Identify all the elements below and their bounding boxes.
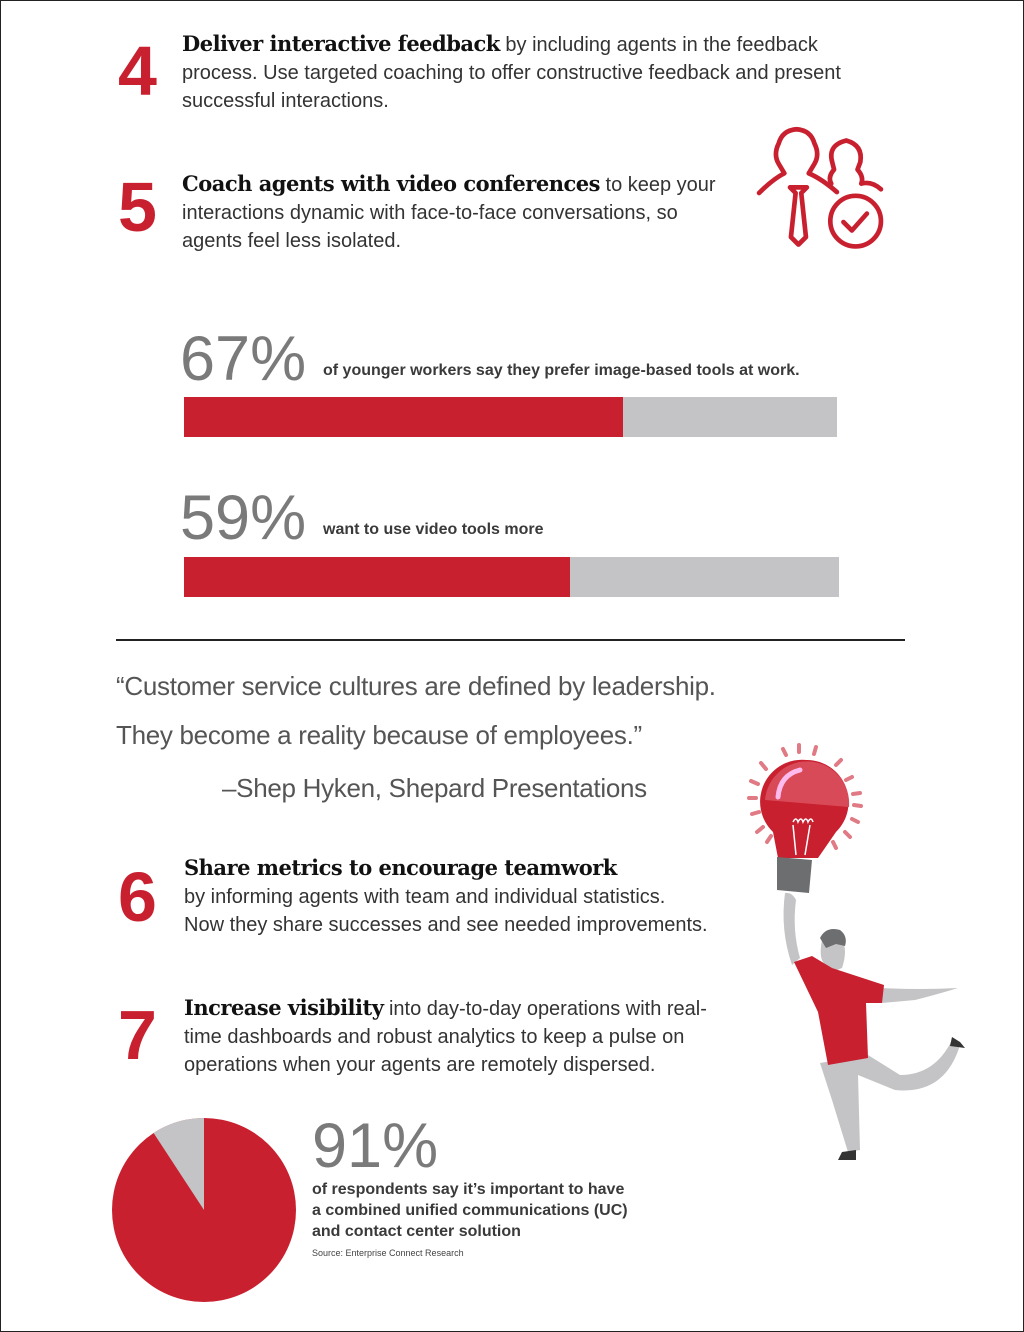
- text 6: [184, 855, 708, 936]
- illustration: man with lightbulb: [747, 743, 965, 1160]
- big number: 67%: [180, 324, 306, 394]
- caption: of younger workers say they prefer image-based tools at work.: [323, 362, 800, 379]
- number 4: 4: [118, 32, 157, 110]
- item 5: [118, 168, 716, 252]
- item 6: [118, 855, 708, 936]
- caption: of respondents say it’s important to have: [312, 1181, 624, 1198]
- text 6: Now they share successes and see needed improvements.: [184, 914, 708, 936]
- caption: [312, 1181, 628, 1240]
- bar 59: [184, 557, 839, 597]
- text 6: by informing agents with team and individual statistics.: [184, 886, 665, 908]
- caption: a combined unified communications (UC): [312, 1202, 628, 1219]
- pie chart 91%: [112, 1118, 296, 1302]
- stat 59%: [180, 483, 839, 597]
- big number: 91%: [312, 1111, 438, 1181]
- item 4: [118, 31, 841, 112]
- number 7: 7: [118, 996, 157, 1074]
- icon: agents with check: [756, 126, 884, 249]
- text 6: Share metrics to encourage teamwork: [184, 855, 617, 880]
- attribution: –Shep Hyken, Shepard Presentations: [222, 773, 647, 803]
- text 5: Coach agents with video conferences to keep your interactions dynamic with face-to-face conversations, so agents feel less isolated.: [182, 171, 716, 252]
- caption: want to use video tools more: [323, 521, 543, 538]
- big number: 59%: [180, 483, 306, 553]
- number 5: 5: [118, 168, 157, 246]
- number 6: 6: [118, 858, 157, 936]
- item 7: [118, 995, 707, 1076]
- stat 91%: [312, 1111, 628, 1258]
- quote: [116, 671, 716, 803]
- text 4: Deliver interactive feedback by including agents in the feedback process. Use targeted coaching to offer constructive feedback and present successful interactions.: [182, 31, 841, 112]
- stat 67%: [180, 324, 837, 437]
- text 7: Increase visibility into day-to-day operations with real-time dashboards and robust analytics to keep a pulse on operations when your agents are remotely dispersed.: [184, 995, 707, 1076]
- quote: They become a reality because of employees.”: [116, 720, 642, 750]
- source: Source: Enterprise Connect Research: [312, 1248, 464, 1258]
- caption: and contact center solution: [312, 1223, 521, 1240]
- bar 67: [184, 397, 837, 437]
- quote: “Customer service cultures are defined by leadership.: [116, 671, 716, 701]
